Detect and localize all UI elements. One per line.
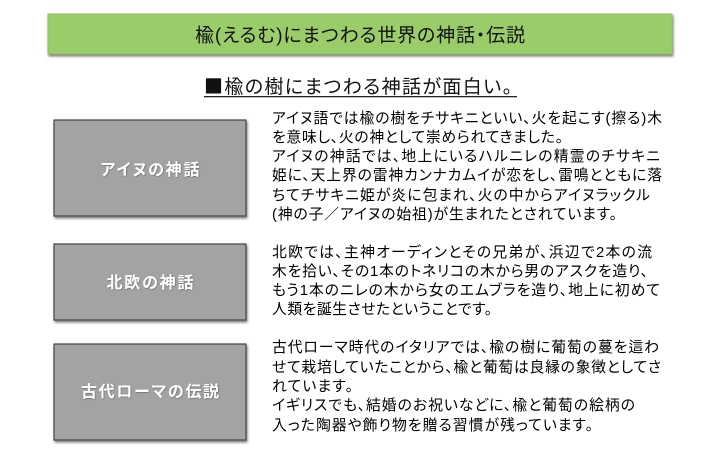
title banner: 楡(えるむ)にまつわる世界の神話・伝説 bbox=[195, 24, 525, 46]
label box: Ainu myth bbox=[54, 120, 246, 216]
text block: Ancient Rome legend: イギリスでも、結婚のお祝いなどに、楡と葡萄の絵柄の bbox=[272, 397, 635, 414]
text block: Ancient Rome legend: 入った陶器や飾り物を贈る習慣が残っています。 bbox=[272, 416, 593, 434]
title banner bbox=[48, 14, 672, 54]
text block: Ainu myth bbox=[272, 110, 662, 223]
text block: Ainu myth: (神の子／アイヌの始祖)が生まれたとされています。 bbox=[272, 206, 617, 223]
text block: Ancient Rome legend bbox=[272, 339, 661, 434]
text block: Ainu myth: ちてチサキニ姫が炎に包まれ、火の中からアイヌラックル bbox=[272, 187, 650, 204]
panel: Ainu myth bbox=[54, 110, 662, 223]
label box: Ancient Rome legend bbox=[54, 344, 246, 440]
text block: Ainu myth: 姫に、天上界の雷神カンナカムイが恋をし、雷鳴とともに落 bbox=[272, 167, 662, 184]
text block: Ainu myth: アイヌ語では楡の樹をチサキニといい、火を起こす(擦る)木 bbox=[272, 110, 662, 127]
text block: Ainu myth: を意味し、火の神として崇められてきました。 bbox=[272, 129, 563, 146]
text block: Ancient Rome legend: れています。 bbox=[272, 378, 353, 395]
text block: Norse myth: 木を拾い、その1本のトネリコの木から男のアスクを造り、 bbox=[272, 263, 648, 280]
text block: Norse myth: 人類を誕生させたということです。 bbox=[272, 301, 492, 318]
panel: Ancient Rome legend bbox=[54, 339, 661, 440]
text block: Norse myth: もう1本のニレの木から女のエムブラを造り、地上に初めて bbox=[272, 281, 660, 299]
text block: Ancient Rome legend: 古代ローマ時代のイタリアでは、楡の樹に葡萄の蔓を這わ bbox=[272, 339, 659, 356]
label box: Norse myth: 北欧の神話 bbox=[106, 274, 194, 292]
text block: Ainu myth: アイヌの神話では、地上にいるハルニレの精霊のチサキニ bbox=[272, 148, 660, 165]
label box: Ainu myth: アイヌの神話 bbox=[100, 161, 200, 179]
text block: Ancient Rome legend: せて栽培していたことから、楡と葡萄は良縁の象徴としてさ bbox=[272, 359, 661, 376]
text block: Norse myth: 北欧では、主神オーディンとその兄弟が、浜辺で2本の流 bbox=[272, 243, 652, 261]
label box: Norse myth bbox=[54, 244, 246, 320]
section heading: ■楡の樹にまつわる神話が面白い。 bbox=[204, 72, 512, 99]
label box: Ancient Rome legend: 古代ローマの伝説 bbox=[81, 382, 219, 401]
panel: Norse myth bbox=[54, 243, 660, 320]
text block: Norse myth bbox=[272, 243, 660, 318]
